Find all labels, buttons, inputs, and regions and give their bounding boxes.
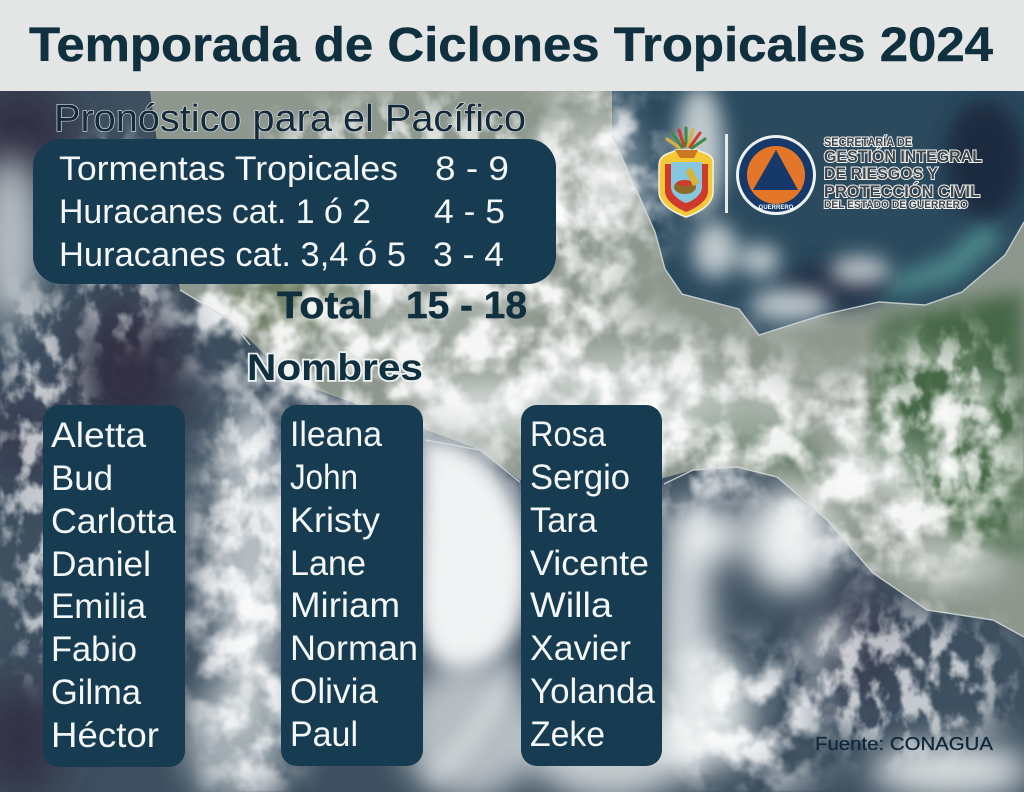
- title: Temporada de Ciclones Tropicales 2024: [29, 19, 993, 72]
- panel: names column 1: Bud: [51, 459, 113, 498]
- panel: names column 1: Daniel: [51, 545, 151, 584]
- panel: names column 3: Yolanda: [530, 672, 656, 711]
- panel: names column 3: Tara: [530, 501, 598, 540]
- title band: [0, 0, 1024, 91]
- panel: names column 2: Miriam: [290, 586, 400, 625]
- panel: names column 2: Norman: [290, 629, 418, 668]
- row: hurricanes cat 3-5: Huracanes cat. 3,4 ó 5: [59, 236, 406, 274]
- panel: names column 3: Zeke: [530, 715, 605, 754]
- panel: names column 1: Emilia: [51, 587, 147, 626]
- divider: [725, 134, 728, 213]
- logo text: agency: PROTECCIÓN CIVIL: [824, 182, 980, 201]
- row: hurricanes cat 1-2: Huracanes cat. 1 ó 2: [59, 193, 371, 231]
- panel: names column 2: Kristy: [290, 501, 381, 540]
- panel: names column 3: Vicente: [530, 544, 649, 583]
- logo text: agency: [824, 134, 982, 211]
- icon: civil protection seal: [736, 135, 816, 215]
- logo text: agency: SECRETARÍA DE: [824, 134, 912, 149]
- total: [277, 285, 527, 327]
- panel: names column 1: Carlotta: [51, 502, 177, 541]
- total: 15 - 18: [406, 285, 527, 327]
- panel: names column 2: Olivia: [290, 672, 379, 711]
- logo text: agency: GESTIÓN INTEGRAL: [824, 147, 982, 166]
- heading: forecast: Pronóstico para el Pacífico: [54, 98, 526, 140]
- panel: names column 1: [43, 405, 185, 767]
- panel: names column 2: Lane: [290, 544, 366, 583]
- heading: names: Nombres: [247, 347, 423, 388]
- panel: names column 2: Ileana: [290, 415, 383, 454]
- panel: forecast table: [33, 139, 556, 284]
- panel: names column 3: Xavier: [530, 629, 631, 668]
- panel: names column 2: John: [290, 458, 358, 497]
- row: tropical storms: Tormentas Tropicales: [59, 150, 398, 188]
- panel: names column 1: Héctor: [51, 716, 159, 755]
- panel: names column 1: Aletta: [51, 416, 147, 455]
- panel: names column 3: Willa: [530, 586, 613, 625]
- total: Total: [277, 285, 373, 327]
- panel: names column 1: Gilma: [51, 673, 142, 712]
- row: hurricanes cat 1-2: 4 - 5: [434, 193, 505, 231]
- source note: Fuente: CONAGUA: [815, 734, 993, 754]
- panel: names column 3: [521, 405, 662, 766]
- panel: names column 2: Paul: [290, 715, 358, 754]
- row: tropical storms: 8 - 9: [435, 150, 509, 188]
- panel: names column 2: [281, 405, 423, 766]
- icon: civil protection seal: GUERRERO: [759, 205, 794, 211]
- logo text: agency: DEL ESTADO DE GUERRERO: [824, 199, 968, 211]
- hurricane: [415, 439, 530, 670]
- row: hurricanes cat 3-5: 3 - 4: [433, 236, 504, 274]
- panel: names column 3: Rosa: [530, 415, 606, 454]
- panel: names column 1: Fabio: [51, 630, 137, 669]
- panel: names column 3: Sergio: [530, 458, 630, 497]
- icon: Guerrero coat of arms: [659, 128, 713, 217]
- logo text: agency: DE RIESGOS Y: [824, 164, 939, 183]
